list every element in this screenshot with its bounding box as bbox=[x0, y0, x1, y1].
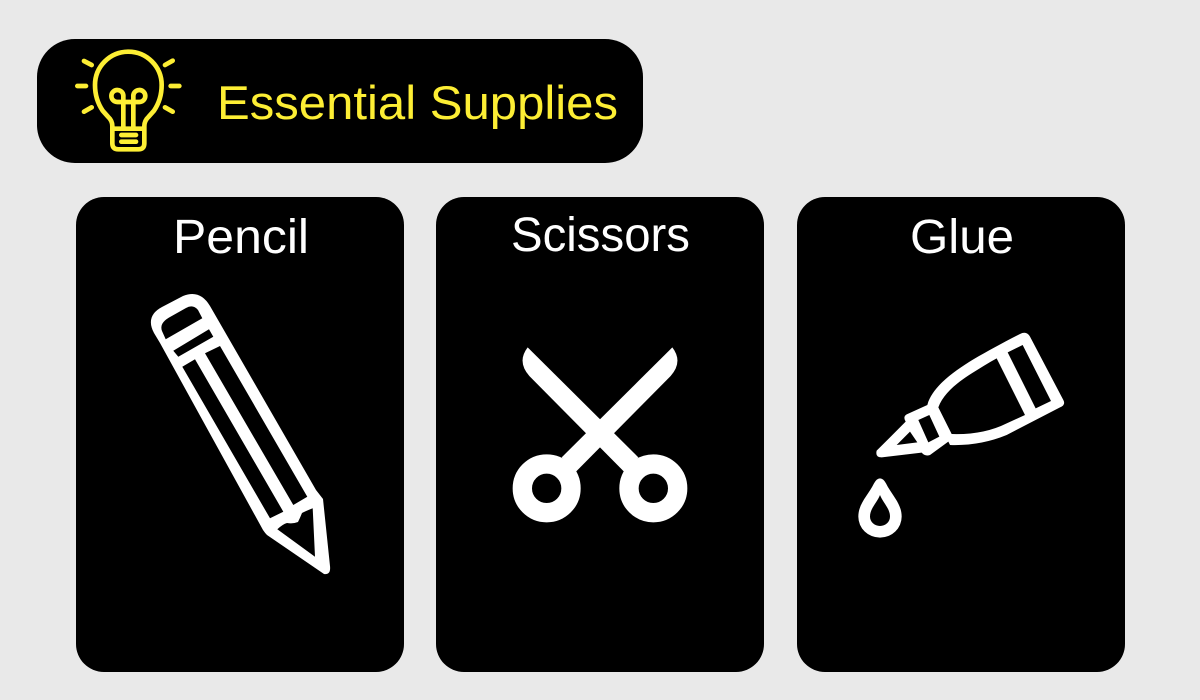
scissors label: Scissors bbox=[511, 209, 690, 262]
panel: glue bbox=[797, 197, 1125, 672]
header pill bbox=[37, 39, 643, 163]
title text: Essential Supplies bbox=[217, 76, 618, 129]
icon: glue bottle bbox=[858, 333, 1064, 538]
icon: pencil bbox=[151, 294, 330, 574]
icon: light bulb bbox=[77, 52, 179, 149]
glue label: Glue bbox=[910, 211, 1014, 264]
pencil label: Pencil bbox=[173, 211, 309, 264]
icon: scissors bbox=[522, 347, 678, 513]
panel: scissors bbox=[436, 197, 764, 672]
panel: pencil bbox=[76, 197, 404, 672]
